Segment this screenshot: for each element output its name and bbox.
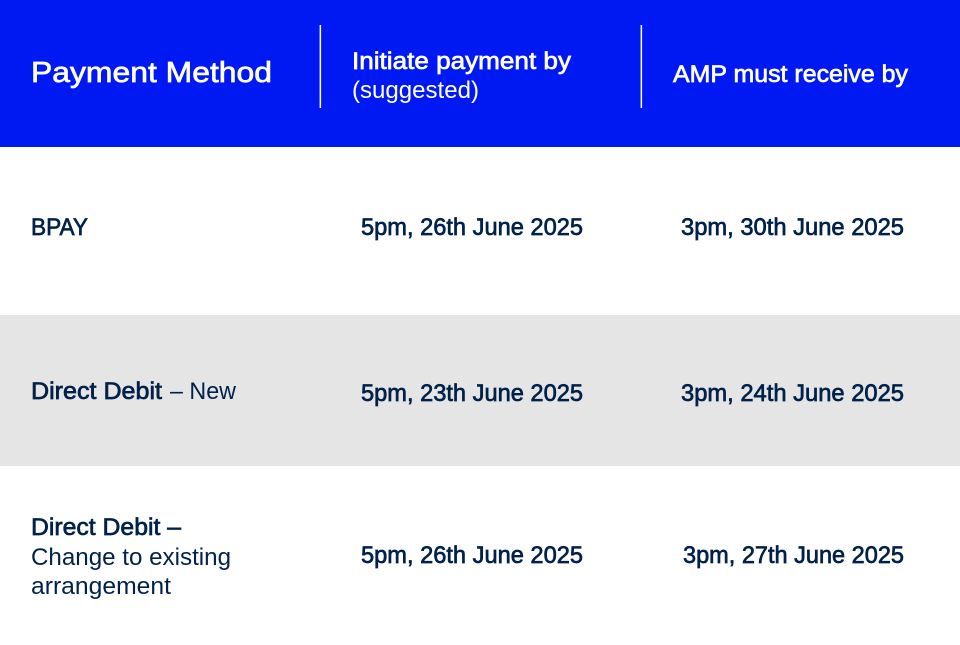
payment method: Direct Debit – New bbox=[31, 378, 237, 405]
initiate date: Direct Debit New: 5pm, 23th June 2025 bbox=[361, 380, 583, 407]
payment method: Direct Debit – New: Direct Debit bbox=[31, 378, 162, 405]
payment method: Direct Debit – New: – New bbox=[170, 378, 237, 405]
payment method: Direct Debit – Change to existing arrangement bbox=[31, 514, 231, 600]
receive date: BPAY: 3pm, 30th June 2025 bbox=[681, 214, 904, 241]
payment method: Direct Debit – Change to existing arrangement: Change to existing bbox=[31, 544, 231, 571]
payment method: Direct Debit – Change to existing arrangement: Direct Debit – bbox=[31, 514, 182, 541]
initiate date: Direct Debit Change: 5pm, 26th June 2025 bbox=[361, 542, 583, 569]
heading: Initiate payment by (suggested) bbox=[352, 48, 571, 104]
heading: Initiate payment by (suggested): (suggested) bbox=[352, 77, 479, 104]
payment method: Direct Debit – Change to existing arrangement: arrangement bbox=[31, 573, 171, 600]
payment method: BPAY: BPAY bbox=[31, 214, 88, 241]
row: BPAY bbox=[31, 214, 904, 241]
initiate date: BPAY: 5pm, 26th June 2025 bbox=[361, 214, 583, 241]
receive date: Direct Debit New: 3pm, 24th June 2025 bbox=[681, 380, 904, 407]
panel: table header bbox=[0, 0, 960, 147]
row: Direct Debit Change bbox=[31, 514, 904, 600]
heading: Payment Method: Payment Method bbox=[31, 57, 272, 89]
heading: AMP must receive by: AMP must receive by bbox=[673, 61, 908, 88]
heading: Initiate payment by (suggested): Initiate payment by bbox=[352, 48, 571, 75]
receive date: Direct Debit Change: 3pm, 27th June 2025 bbox=[683, 542, 904, 569]
row: Direct Debit New bbox=[0, 315, 960, 466]
